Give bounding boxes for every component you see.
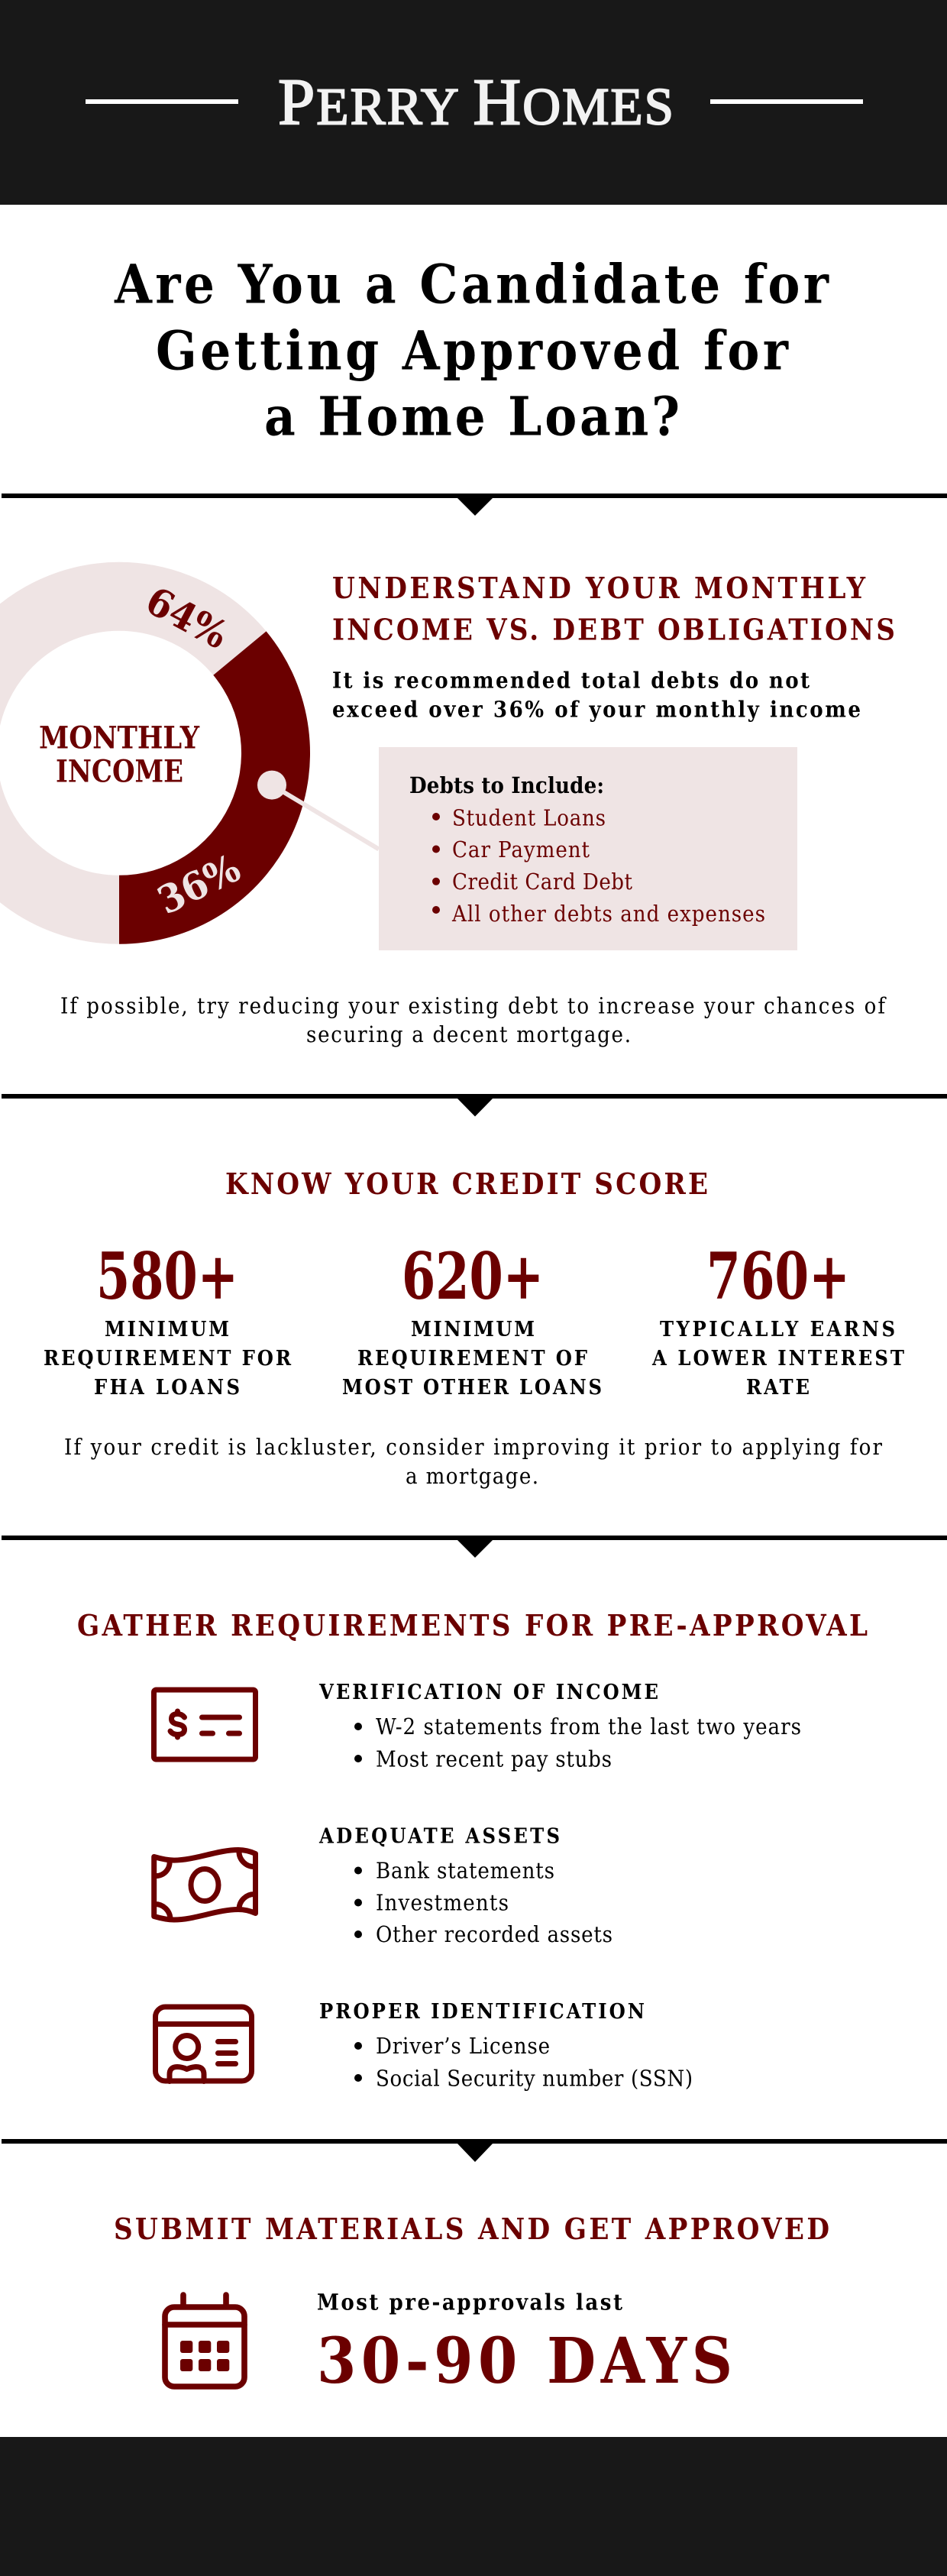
divider 3 — [2, 1536, 947, 1558]
panel: debts to include: All other debts and expenses — [451, 901, 765, 927]
text: improve credit: a mortgage. — [406, 1463, 538, 1489]
title: a Home Loan? — [264, 385, 680, 448]
item: proper identification — [319, 2000, 693, 2092]
title: Are You a Candidate for — [114, 252, 829, 316]
heading: submit materials and get approved: SUBMIT MATERIALS AND GET APPROVED — [114, 2212, 829, 2246]
text: recommendation: exceed over 36% of your monthly income — [332, 697, 861, 723]
divider 1 — [2, 494, 947, 516]
icon: identification card — [156, 2007, 252, 2081]
item: adequate assets: Investments — [376, 1890, 509, 1916]
text: improve credit — [64, 1434, 883, 1489]
donut chart — [0, 578, 310, 944]
item: proper identification: PROPER IDENTIFICATION — [319, 2000, 645, 2024]
panel: requirements for pre-approval — [77, 1608, 868, 2092]
divider 2 — [2, 1094, 947, 1117]
donut chart: 64% — [138, 578, 235, 658]
icon: calendar — [165, 2295, 244, 2387]
stat: 620+: 620+ — [402, 1238, 544, 1314]
item: verification of income: VERIFICATION OF INCOME — [318, 1681, 658, 1704]
heading: understand income vs debt — [332, 571, 895, 646]
stat: 620+: MINIMUM — [411, 1318, 535, 1341]
text: reduce existing debt — [60, 993, 887, 1047]
panel: credit score — [44, 1167, 904, 1489]
item: adequate assets: ADEQUATE ASSETS — [318, 1824, 560, 1849]
icon: check with dollar sign — [154, 1690, 255, 1759]
stat: 760+: A LOWER INTEREST — [651, 1347, 904, 1371]
callout connector — [257, 771, 379, 849]
text: improve credit: If your credit is lackluster, consider improving it prior to applying for — [64, 1434, 883, 1460]
panel: debts to include: Student Loans — [452, 805, 606, 831]
stat: 760+: TYPICALLY EARNS — [660, 1318, 895, 1341]
item: verification of income: W-2 statements from the last two years — [376, 1714, 801, 1739]
stat: 580+: FHA LOANS — [94, 1376, 240, 1400]
donut chart: MONTHLY — [39, 720, 200, 756]
divider 4 — [2, 2139, 947, 2162]
stat: 620+: REQUIREMENT OF — [357, 1347, 587, 1371]
panel: debts to include: Debts to Include: — [409, 772, 604, 798]
item: verification of income — [318, 1681, 801, 1772]
donut chart: INCOME — [56, 753, 183, 790]
stat: 580+: REQUIREMENT FOR — [44, 1347, 292, 1371]
heading: know your credit score: KNOW YOUR CREDIT SCORE — [225, 1167, 708, 1201]
icon: banknote — [154, 1850, 255, 1920]
panel: debts to include: Car Payment — [452, 837, 590, 862]
stat: 580+: MINIMUM — [105, 1318, 229, 1341]
text: reduce existing debt: securing a decent mortgage. — [306, 1021, 631, 1047]
item: adequate assets — [318, 1824, 612, 1947]
item: proper identification: Social Security number (SSN) — [376, 2066, 693, 2092]
heading: understand income vs debt: INCOME VS. DEBT OBLIGATIONS — [332, 613, 895, 646]
footer band — [0, 2437, 947, 2576]
stat: 760+: 760+ — [706, 1238, 850, 1314]
header band — [0, 0, 947, 205]
stat: 760+ — [651, 1238, 904, 1400]
stat: 620+ — [342, 1238, 602, 1400]
item: adequate assets: Bank statements — [376, 1858, 554, 1884]
stat: 760+: RATE — [746, 1376, 810, 1400]
heading: gather requirements: GATHER REQUIREMENTS FOR PRE-APPROVAL — [77, 1608, 868, 1642]
stat: 580+ — [44, 1238, 292, 1400]
title — [114, 252, 829, 448]
text: recommendation: It is recommended total debts do not — [332, 668, 810, 694]
text: most pre-approvals last: Most pre-approvals last — [317, 2289, 622, 2315]
item: proper identification: Driver’s License — [376, 2033, 550, 2059]
logo: Perry Homes: PERRY HOMES — [278, 64, 674, 139]
donut chart: 36% — [150, 845, 247, 924]
heading: understand income vs debt: UNDERSTAND YOUR MONTHLY — [332, 571, 866, 605]
item: verification of income: Most recent pay stubs — [376, 1746, 612, 1772]
stat: 30-90 days: 30-90 DAYS — [317, 2325, 732, 2398]
stat: 620+: MOST OTHER LOANS — [342, 1376, 602, 1400]
panel: monthly income vs debt — [0, 571, 895, 1047]
text: reduce existing debt: If possible, try reducing your existing debt to increase your chances of — [60, 993, 887, 1019]
item: adequate assets: Other recorded assets — [376, 1921, 612, 1947]
text: recommendation — [332, 668, 861, 723]
panel: debts to include — [379, 747, 797, 950]
panel: submit materials — [114, 2212, 829, 2398]
panel: debts to include: Credit Card Debt — [452, 869, 633, 895]
title: Getting Approved for — [156, 319, 789, 382]
stat: 580+: 580+ — [96, 1238, 238, 1314]
